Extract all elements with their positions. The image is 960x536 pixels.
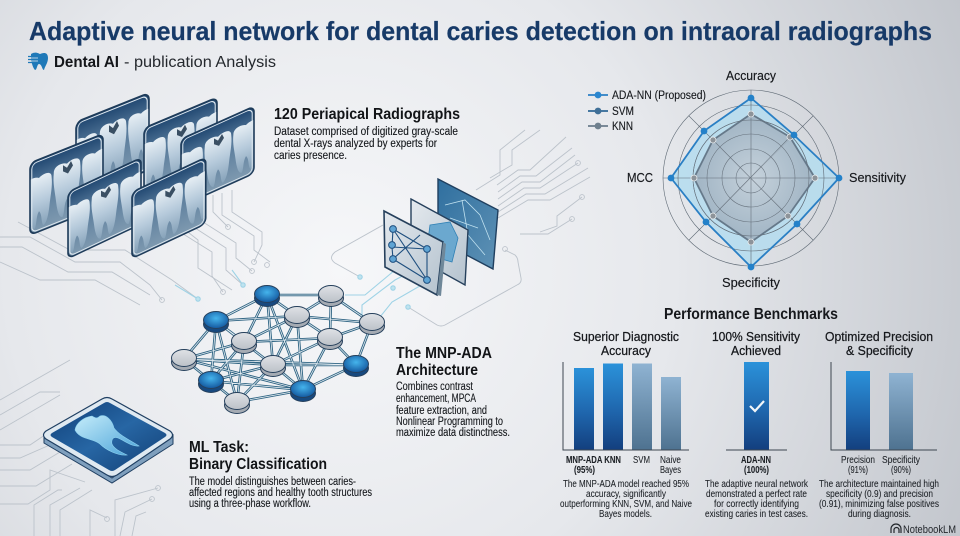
bar labels	[566, 455, 681, 476]
description: existing caries in test cases.	[705, 509, 808, 520]
subheading: Optimized Precision	[825, 329, 933, 344]
description: The adaptive neural network	[705, 479, 809, 490]
subheading	[712, 329, 800, 358]
icon: tooth tile	[44, 398, 173, 483]
description	[705, 479, 809, 520]
network edges	[184, 295, 372, 402]
text block: 120 periapical radiographs: Dataset comprised of digitized gray-scale	[274, 126, 458, 138]
text block: MNP-ADA architecture: Architecture	[396, 362, 478, 379]
radar labels: Specificity	[722, 276, 781, 290]
bar labels: Specificity	[882, 455, 920, 466]
panel: back layer	[438, 179, 498, 269]
radiograph cards	[26, 91, 259, 260]
bar chart	[726, 362, 787, 450]
description: outperforming KNN, SVM, and Naive	[560, 499, 692, 510]
description: (0.91), minimizing false positives	[819, 499, 939, 510]
subtitle with logo: Dental AI	[54, 54, 119, 71]
bar labels: Bayes	[660, 465, 681, 476]
text block: ML task: using a three-phase workflow.	[189, 498, 311, 510]
text block: MNP-ADA architecture: Nonlinear Programming to	[396, 416, 503, 428]
panel: front layer	[384, 211, 446, 296]
description: during diagnosis.	[848, 509, 911, 520]
bar labels: SVM	[633, 455, 650, 466]
title: Adaptive neural network for dental caries detection on intraoral radiographs	[29, 16, 932, 46]
subheading: & Specificity	[846, 343, 913, 358]
processing panels	[384, 179, 498, 296]
network diagram	[172, 286, 384, 414]
subheading	[825, 329, 933, 358]
bar label: ADA-NN	[741, 455, 771, 466]
subheading: Accuracy	[601, 343, 651, 358]
description	[560, 479, 692, 520]
radar labels: MCC	[627, 171, 653, 185]
panel: middle layer	[411, 199, 468, 285]
subtitle with logo	[28, 53, 276, 71]
bar chart	[563, 362, 689, 450]
radar chart	[627, 69, 907, 290]
subheading	[573, 329, 679, 358]
radar legend	[588, 90, 706, 133]
bar label: (100%)	[744, 465, 769, 476]
description: demonstrated a perfect rate	[706, 489, 807, 500]
text block: MNP-ADA architecture: enhancement, MPCA	[396, 393, 476, 405]
radar labels: Accuracy	[726, 69, 777, 83]
bar labels: (91%)	[848, 465, 868, 476]
text block: MNP-ADA architecture: feature extraction, and	[396, 405, 487, 417]
description: The MNP-ADA model reached 95%	[563, 479, 689, 490]
icon: check mark	[750, 401, 764, 411]
description	[819, 479, 939, 520]
description: accuracy, significantly	[586, 489, 666, 500]
text block: 120 periapical radiographs: caries presence.	[274, 150, 347, 162]
text block: MNP-ADA architecture	[396, 345, 510, 439]
text block: 120 periapical radiographs: dental X-rays analyzed by experts for	[274, 138, 437, 150]
description: specificity (0.9) and precision	[826, 489, 933, 500]
subheading: 100% Sensitivity	[712, 329, 800, 344]
heading: performance benchmarks: Performance Benchmarks	[664, 306, 838, 323]
radar legend: ADA-NN (Proposed)	[612, 90, 706, 102]
icon: dental logo	[28, 53, 48, 70]
bar labels: (95%)	[574, 465, 595, 476]
text block: MNP-ADA architecture: The MNP-ADA	[396, 345, 492, 362]
ada-nn area	[671, 98, 839, 267]
subtitle with logo: - publication Analysis	[124, 54, 276, 71]
text block: ML task: affected regions and healthy tooth structures	[189, 487, 372, 499]
text block: 120 periapical radiographs: 120 Periapical Radiographs	[274, 106, 460, 123]
text block: 120 periapical radiographs	[274, 106, 460, 162]
radar legend: KNN	[612, 121, 633, 133]
text block: ML task	[189, 439, 372, 510]
ada-nn outline	[671, 98, 839, 267]
panel: precision and specificity	[819, 329, 939, 520]
bar labels: (90%)	[891, 465, 911, 476]
radar labels	[627, 69, 907, 290]
subheading: Achieved	[731, 343, 781, 358]
radar legend: SVM	[612, 106, 634, 118]
bar labels: MNP-ADA KNN	[566, 455, 621, 466]
radar grid	[663, 90, 839, 266]
text block: ML task: Binary Classification	[189, 456, 327, 473]
text block: MNP-ADA architecture: Combines contrast	[396, 381, 474, 393]
panel: superior diagnostic accuracy	[560, 329, 692, 520]
text block: ML task: ML Task:	[189, 439, 249, 456]
panel: 100% sensitivity	[705, 329, 809, 520]
description: for correctly identifying	[714, 499, 799, 510]
description: Bayes models.	[599, 509, 652, 520]
bar labels: Naive	[660, 455, 681, 466]
circuit traces	[0, 130, 590, 536]
glowing data traces	[175, 270, 425, 322]
radar points	[668, 95, 842, 270]
bar label	[741, 455, 771, 476]
bar labels: Precision	[841, 455, 875, 466]
bar labels	[841, 455, 920, 476]
text block: ML task: The model distinguishes between caries-	[189, 476, 356, 488]
network nodes	[172, 286, 384, 414]
bar chart	[831, 362, 937, 450]
radar labels: Sensitivity	[849, 171, 907, 185]
subheading: Superior Diagnostic	[573, 329, 679, 344]
svm and knn area	[694, 114, 815, 242]
radar grid inner	[693, 114, 815, 242]
text block: MNP-ADA architecture: maximize data distinctness.	[396, 427, 510, 439]
